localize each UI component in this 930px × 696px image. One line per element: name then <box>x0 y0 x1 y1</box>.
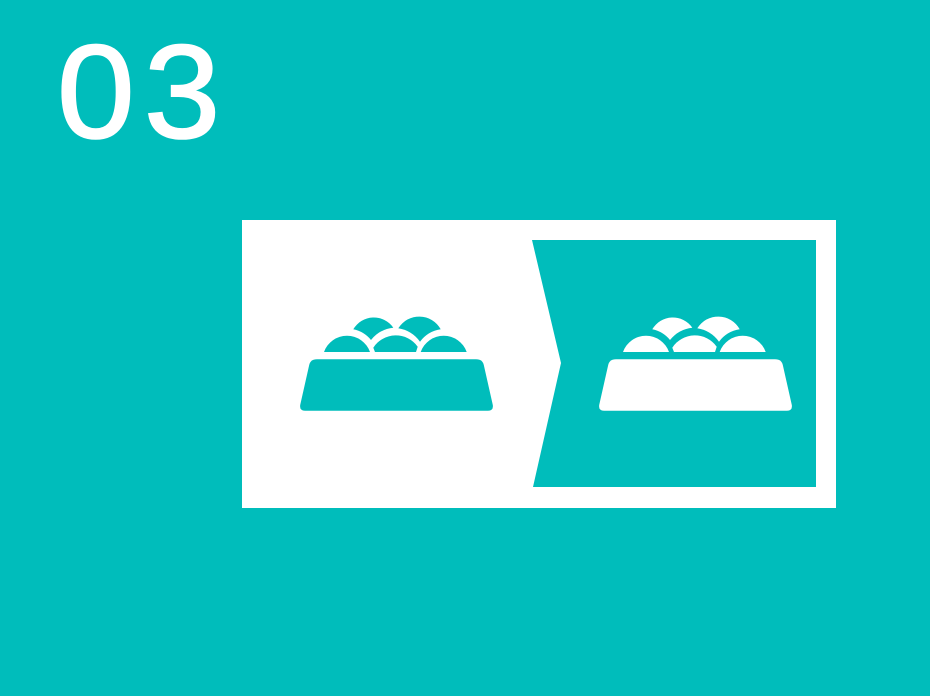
icon: white food bowl <box>599 317 792 411</box>
title: number 03 <box>57 17 220 166</box>
right arrow-notched panel <box>532 240 816 487</box>
frame background <box>242 220 836 508</box>
title: number 03: 3 <box>144 17 220 166</box>
icon: teal food bowl <box>300 317 493 411</box>
title: number 03: 0 <box>57 18 135 166</box>
panel: comparison frame <box>242 220 836 508</box>
